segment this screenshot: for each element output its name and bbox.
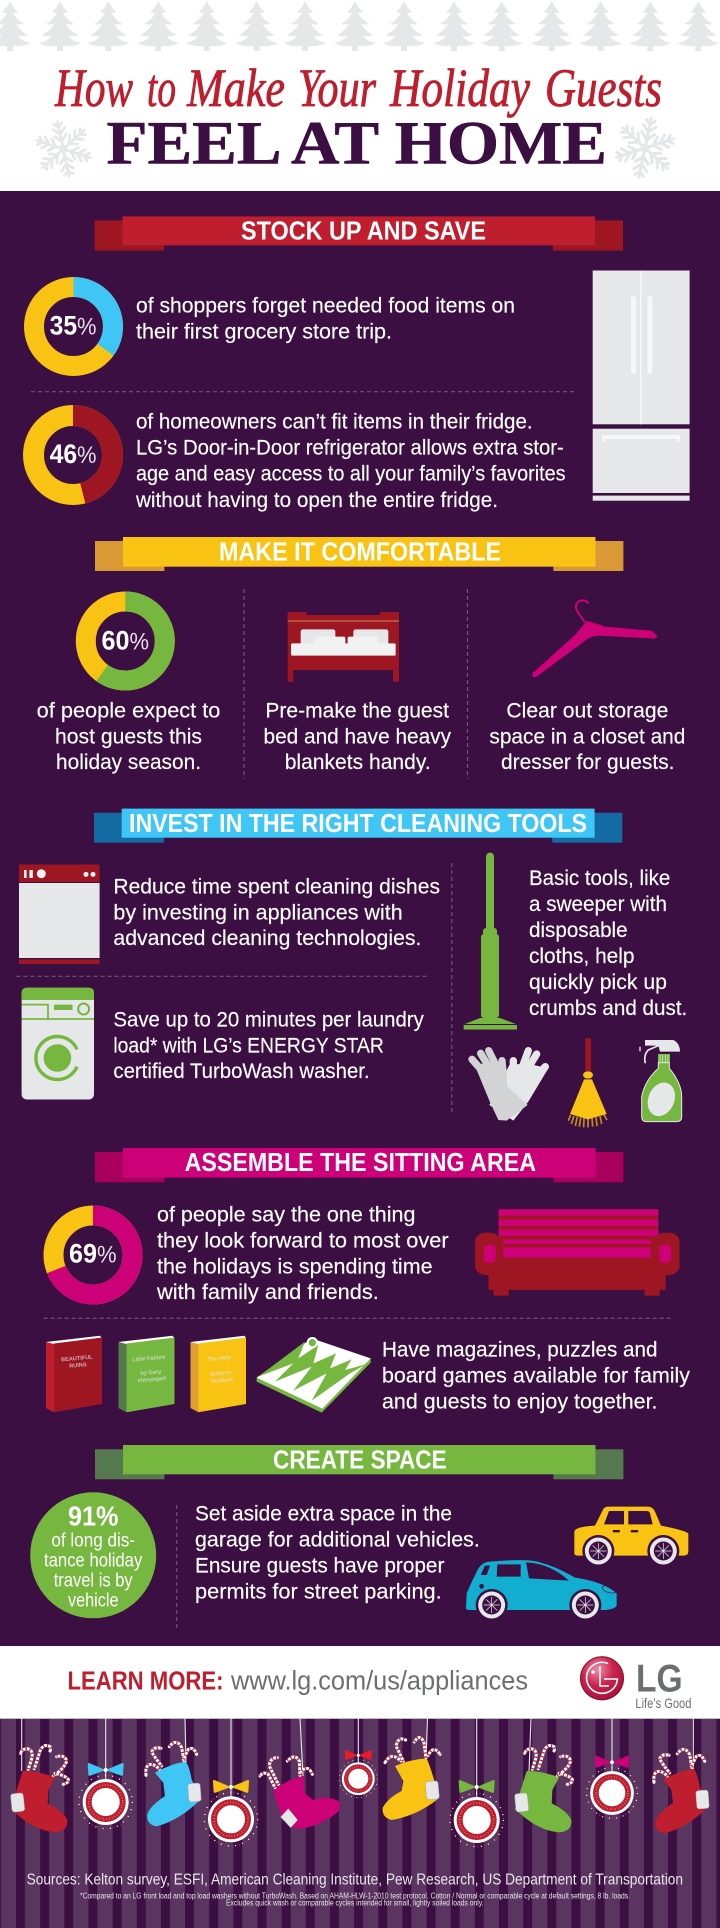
logo: LG: Life’s Good xyxy=(635,1695,691,1711)
text: homeowners stat: LG’s Door-in-Door refrigerator allows extra stor- xyxy=(136,436,564,460)
icon: bed xyxy=(288,612,399,682)
callout: 91% stat circle: vehicle xyxy=(68,1591,118,1612)
text: footnote: *Compared to an LG front load and top load washers without TurboWash. Based on AHAM-HLW-1-2010 test protocol. Cotton / Normal or comparable cycle at default settings, 8 lb. loads. xyxy=(80,1891,630,1900)
text: homeowners stat xyxy=(135,410,566,512)
text: garage and parking xyxy=(195,1502,480,1604)
donut chart: 46% xyxy=(34,416,112,494)
donut chart: 69%: % xyxy=(97,1241,117,1268)
title xyxy=(54,58,662,177)
ribbon heading: stock up and save xyxy=(95,216,623,250)
icon: rubber gloves xyxy=(472,1051,548,1121)
icon: blue car xyxy=(466,1560,617,1621)
text: basic tools: cloths, help xyxy=(529,944,635,968)
donut chart: 46%: % xyxy=(77,442,96,469)
text: basic tools: Basic tools, like xyxy=(529,866,670,890)
icon: green book: by Gary xyxy=(140,1369,162,1377)
icon: red book: RUINS xyxy=(69,1362,87,1370)
text: people expect to host: holiday season. xyxy=(56,750,201,774)
text: basic tools: crumbs and dust. xyxy=(529,996,687,1020)
ribbon heading: create space xyxy=(95,1444,623,1479)
text: footnote: Excludes quick wash or comparable cycles intended for small, lightly soiled loads only. xyxy=(226,1899,484,1908)
text: learn more url: www.lg.com/us/appliances xyxy=(230,1665,528,1695)
text: people expect to host: of people expect to xyxy=(37,698,220,722)
icon: yellow car xyxy=(574,1507,688,1567)
text: pre-make the guest bed: Pre-make the guest xyxy=(265,698,449,722)
logo: LG: LG xyxy=(636,1658,683,1701)
callout: 91% stat circle: of long dis- xyxy=(51,1531,135,1552)
ribbon heading: make it comfortable xyxy=(95,537,623,571)
icon: green book: Little Failure xyxy=(132,1355,166,1363)
donut chart: 60%: % xyxy=(130,628,149,655)
text: magazines and games: board games available for family xyxy=(382,1364,690,1388)
decorative row of trees xyxy=(0,1,719,51)
icon: coat hanger xyxy=(532,600,658,677)
section: create space xyxy=(30,1444,688,1630)
text: basic tools: quickly pick up xyxy=(529,970,667,994)
panel: learn more band xyxy=(0,1646,720,1718)
text: homeowners stat: age and easy access to all your family’s favorites xyxy=(136,462,566,486)
donut chart: 69%: 69 xyxy=(69,1238,97,1268)
ribbon heading: sitting area xyxy=(95,1147,623,1182)
text: clear out storage: space in a closet and xyxy=(489,724,685,748)
text: pre-make the guest bed: blankets handy. xyxy=(285,750,431,774)
donut chart: 35%: 35 xyxy=(50,311,77,341)
ornament: blue bow xyxy=(79,1763,132,1829)
hanging strings xyxy=(22,1718,693,1820)
ribbon heading: create space: CREATE SPACE xyxy=(273,1444,447,1474)
icon: yellow book: The Help xyxy=(207,1355,232,1363)
text: garage and parking: Set aside extra space in the xyxy=(195,1502,452,1526)
icon: yellow book xyxy=(190,1336,246,1412)
icon: yellow book: Stockett xyxy=(211,1377,233,1385)
section: make it comfortable xyxy=(37,537,685,779)
ornament: yellow bow xyxy=(204,1780,258,1846)
section: invest in the right cleaning tools xyxy=(16,808,687,1127)
text: learn more url xyxy=(68,1665,528,1695)
icon: board game xyxy=(257,1337,371,1413)
text: homeowners stat: of homeowners can’t fit items in their fridge. xyxy=(136,410,533,434)
text: basic tools xyxy=(529,866,687,1020)
text: reduce time cleaning dishes: Reduce time spent cleaning dishes xyxy=(113,875,440,899)
stocking: blue xyxy=(146,1742,201,1826)
text: reduce time cleaning dishes: by investing in appliances with xyxy=(113,901,403,925)
text: reduce time cleaning dishes xyxy=(113,875,440,950)
donut chart: 46%: 46 xyxy=(50,439,77,469)
panel: purple content background xyxy=(0,191,720,1646)
stocking: yellow xyxy=(383,1737,440,1820)
text: learn more url: LEARN MORE: xyxy=(68,1667,224,1695)
panel: striped footer xyxy=(0,1718,720,1928)
icon: refrigerator xyxy=(593,270,690,501)
stocking: red right xyxy=(654,1749,709,1833)
text: save up to 20 minutes: Save up to 20 minutes per laundry xyxy=(113,1008,424,1032)
title: Holiday xyxy=(389,58,530,118)
callout: 91% stat circle: 91% xyxy=(68,1501,118,1532)
donut chart: 35% xyxy=(34,287,113,366)
text: shoppers stat: of shoppers forget needed food items on xyxy=(136,294,515,318)
text: people expect to host: host guests this xyxy=(55,724,202,748)
text: homeowners stat: without having to open the entire fridge. xyxy=(135,488,498,512)
callout: 91% stat circle xyxy=(30,1492,156,1618)
text: basic tools: disposable xyxy=(529,918,628,942)
text: garage and parking: garage for additional vehicles. xyxy=(195,1528,480,1552)
text: footnote xyxy=(80,1891,630,1908)
icon: washing machine xyxy=(22,988,94,1100)
icon: red book: BEAUTIFUL xyxy=(61,1355,94,1363)
icon: left snowflake xyxy=(31,116,96,182)
text: pre-make the guest bed: bed and have heavy xyxy=(264,724,451,748)
ornament: magenta bow xyxy=(587,1756,637,1818)
text: family and friends stat: they look forward to most over xyxy=(157,1228,449,1252)
text: family and friends stat: with family and friends. xyxy=(156,1280,379,1304)
icon: dishwasher xyxy=(19,864,100,964)
text: magazines and games: and guests to enjoy together. xyxy=(382,1390,658,1414)
text: save up to 20 minutes: certified TurboWash washer. xyxy=(113,1059,370,1083)
donut chart: 69% xyxy=(54,1216,132,1294)
ribbon heading: make it comfortable: MAKE IT COMFORTABLE xyxy=(219,537,501,567)
text: garage and parking: permits for street parking. xyxy=(195,1580,442,1604)
text: save up to 20 minutes xyxy=(113,1008,424,1083)
title: to xyxy=(147,58,176,118)
text: clear out storage xyxy=(489,698,685,774)
title: Your xyxy=(298,58,377,118)
text: family and friends stat: the holidays is spending time xyxy=(157,1254,432,1278)
ornament: red bow small xyxy=(339,1750,377,1798)
ribbon heading: stock up and save: STOCK UP AND SAVE xyxy=(241,216,486,246)
icon: green book xyxy=(118,1336,174,1412)
text: pre-make the guest bed xyxy=(264,698,451,774)
section: assemble the sitting area xyxy=(44,1147,690,1414)
icon: floor sweeper xyxy=(464,853,517,1030)
text: family and friends stat xyxy=(156,1203,449,1304)
text: shoppers stat xyxy=(136,294,515,344)
icon: broom xyxy=(568,1038,607,1127)
text: garage and parking: Ensure guests have proper xyxy=(195,1554,444,1578)
ornament: green bow xyxy=(450,1780,503,1847)
text: clear out storage: dresser for guests. xyxy=(501,750,674,774)
text: reduce time cleaning dishes: advanced cleaning technologies. xyxy=(113,926,421,950)
icon: right snowflake xyxy=(610,112,680,184)
icon: sofa xyxy=(475,1209,679,1296)
stocking: red xyxy=(10,1745,68,1832)
icon: spray bottle xyxy=(639,1040,682,1122)
logo: LG xyxy=(580,1656,691,1711)
stocking: magenta xyxy=(260,1757,340,1829)
text: basic tools: a sweeper with xyxy=(529,892,667,916)
title: How xyxy=(54,58,133,118)
donut chart: 60%: 60 xyxy=(102,625,130,655)
text: magazines and games: Have magazines, puzzles and xyxy=(382,1338,658,1362)
text: family and friends stat: of people say the one thing xyxy=(157,1203,416,1227)
icon: yellow book: Kathryn xyxy=(210,1370,232,1378)
section: stock up and save xyxy=(31,216,690,512)
ribbon heading: sitting area: ASSEMBLE THE SITTING AREA xyxy=(185,1147,536,1177)
text: shoppers stat: their first grocery store trip. xyxy=(136,320,392,344)
callout: 91% stat circle: travel is by xyxy=(54,1571,133,1592)
title: FEEL AT HOME xyxy=(106,110,607,177)
callout: 91% stat circle: tance holiday xyxy=(44,1551,143,1572)
icon: red book xyxy=(46,1336,102,1412)
icon: green book: shteyngart xyxy=(137,1376,167,1384)
text: clear out storage: Clear out storage xyxy=(506,698,668,722)
text: magazines and games xyxy=(382,1338,690,1414)
ribbon heading: cleaning tools: INVEST IN THE RIGHT CLEANING TOOLS xyxy=(129,808,587,838)
stocking: green xyxy=(514,1745,572,1832)
text: people expect to host xyxy=(37,698,220,774)
title: Make xyxy=(186,58,285,118)
text: save up to 20 minutes: load* with LG’s ENERGY STAR xyxy=(113,1033,384,1057)
title: Guests xyxy=(545,58,662,118)
donut chart: 60% xyxy=(86,602,165,680)
donut chart: 35%: % xyxy=(77,314,96,341)
